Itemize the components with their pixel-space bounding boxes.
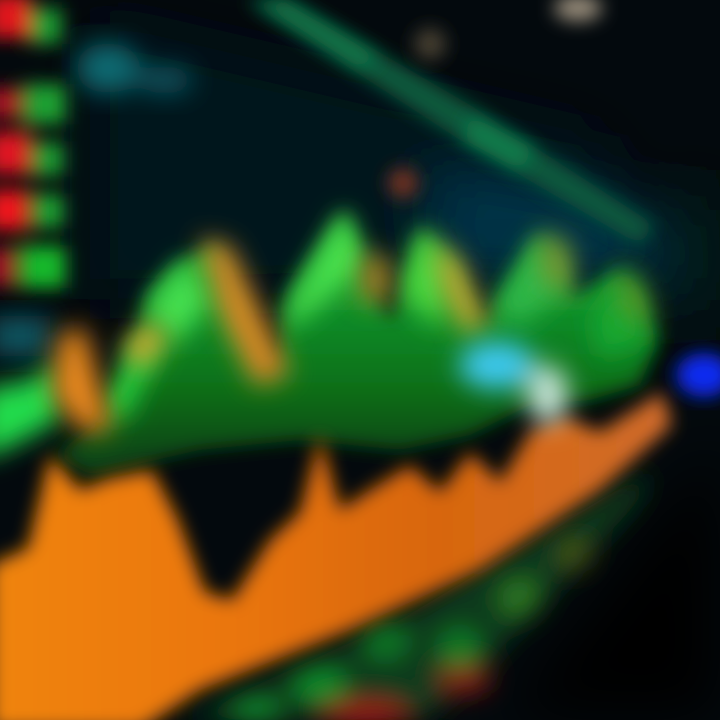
blue blob right (676, 353, 720, 397)
teal blob left middle (0, 316, 50, 356)
orange peak highlights (52, 230, 654, 432)
cyan and pale highlights (459, 341, 568, 425)
bright green highlights on peaks (145, 210, 650, 360)
red and green candles, left edge (0, 0, 66, 288)
bright green band, left (0, 340, 160, 460)
distant dots (388, 0, 602, 198)
green area chart (55, 210, 658, 475)
diagonal green trend line (245, 0, 655, 245)
bottom candle band (180, 470, 650, 720)
teal blob top left (76, 43, 193, 94)
orange area chart (0, 392, 672, 720)
